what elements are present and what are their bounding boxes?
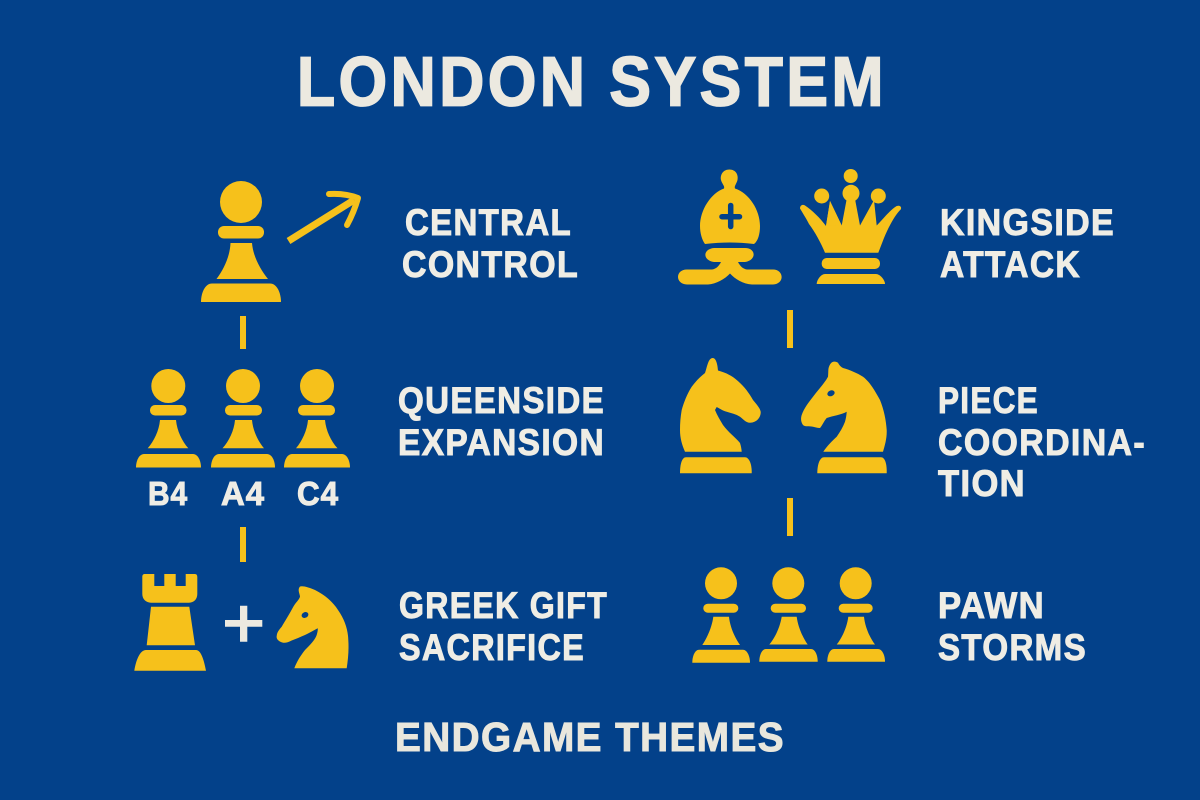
label: kingside attack: [940, 201, 1115, 285]
icon: knight base right: [817, 457, 887, 473]
label: greek gift sacrifice: SACRIFICE: [399, 626, 585, 668]
label: queenside expansion: QUEENSIDE: [398, 379, 605, 421]
arrow: diagonal advance: [288, 194, 358, 241]
label: central control: CONTROL: [402, 243, 579, 285]
icon: knight eye: [301, 611, 309, 619]
icon: knight: [277, 586, 349, 668]
label: a4: A4: [221, 475, 265, 512]
label: kingside attack: KINGSIDE: [940, 201, 1115, 243]
connector: left upper: [240, 316, 246, 349]
icon: plus: [225, 606, 262, 642]
connector: left lower: [240, 527, 246, 562]
title: LONDON SYSTEM: [297, 42, 887, 120]
label: central control: CENTRAL: [405, 201, 572, 243]
icon: pawn right: [827, 567, 885, 662]
icon: pawn b4: [136, 369, 201, 468]
icon: rook: [134, 574, 206, 671]
panel: queenside expansion: [136, 369, 605, 512]
connector: right lower: [787, 498, 793, 536]
panel: kingside attack: [678, 169, 1115, 285]
icon: knight facing right: [680, 358, 761, 452]
icon: bishop: [678, 170, 782, 284]
icon: knight base left: [680, 457, 752, 473]
label: piece coordination: [938, 379, 1146, 504]
icon: pawn c4: [284, 369, 350, 468]
panel: pawn storms: [692, 567, 1087, 668]
label: b4: B4: [148, 475, 188, 512]
icon: knight eye: [826, 389, 836, 397]
panel: piece coordination: [680, 358, 1146, 504]
label: queenside expansion: EXPANSION: [398, 421, 605, 463]
connector: right upper: [787, 310, 793, 348]
label: piece coordination: PIECE: [938, 379, 1039, 421]
label: pawn storms: [938, 584, 1087, 668]
icon: pawn a4: [211, 369, 275, 468]
label: piece coordination: TION: [938, 462, 1026, 504]
icon: pawn middle: [759, 567, 818, 662]
icon: pawn: [201, 181, 281, 302]
label: pawn storms: PAWN: [938, 584, 1045, 626]
icon: pawn left: [692, 567, 750, 663]
label: queenside expansion: [398, 379, 605, 463]
label: central control: [402, 201, 579, 285]
icon: queen: [800, 169, 901, 284]
label: pawn storms: STORMS: [938, 626, 1087, 668]
label: greek gift sacrifice: [399, 584, 608, 668]
label: c4: C4: [297, 475, 339, 512]
icon: knight facing left: [801, 362, 887, 452]
panel: greek gift sacrifice: [134, 574, 608, 671]
label: kingside attack: ATTACK: [940, 243, 1081, 285]
label: piece coordination: COORDINA-: [938, 421, 1146, 463]
label: greek gift sacrifice: GREEK GIFT: [399, 584, 608, 626]
panel: central control: [201, 181, 579, 302]
footer heading: ENDGAME THEMES: [395, 714, 785, 760]
